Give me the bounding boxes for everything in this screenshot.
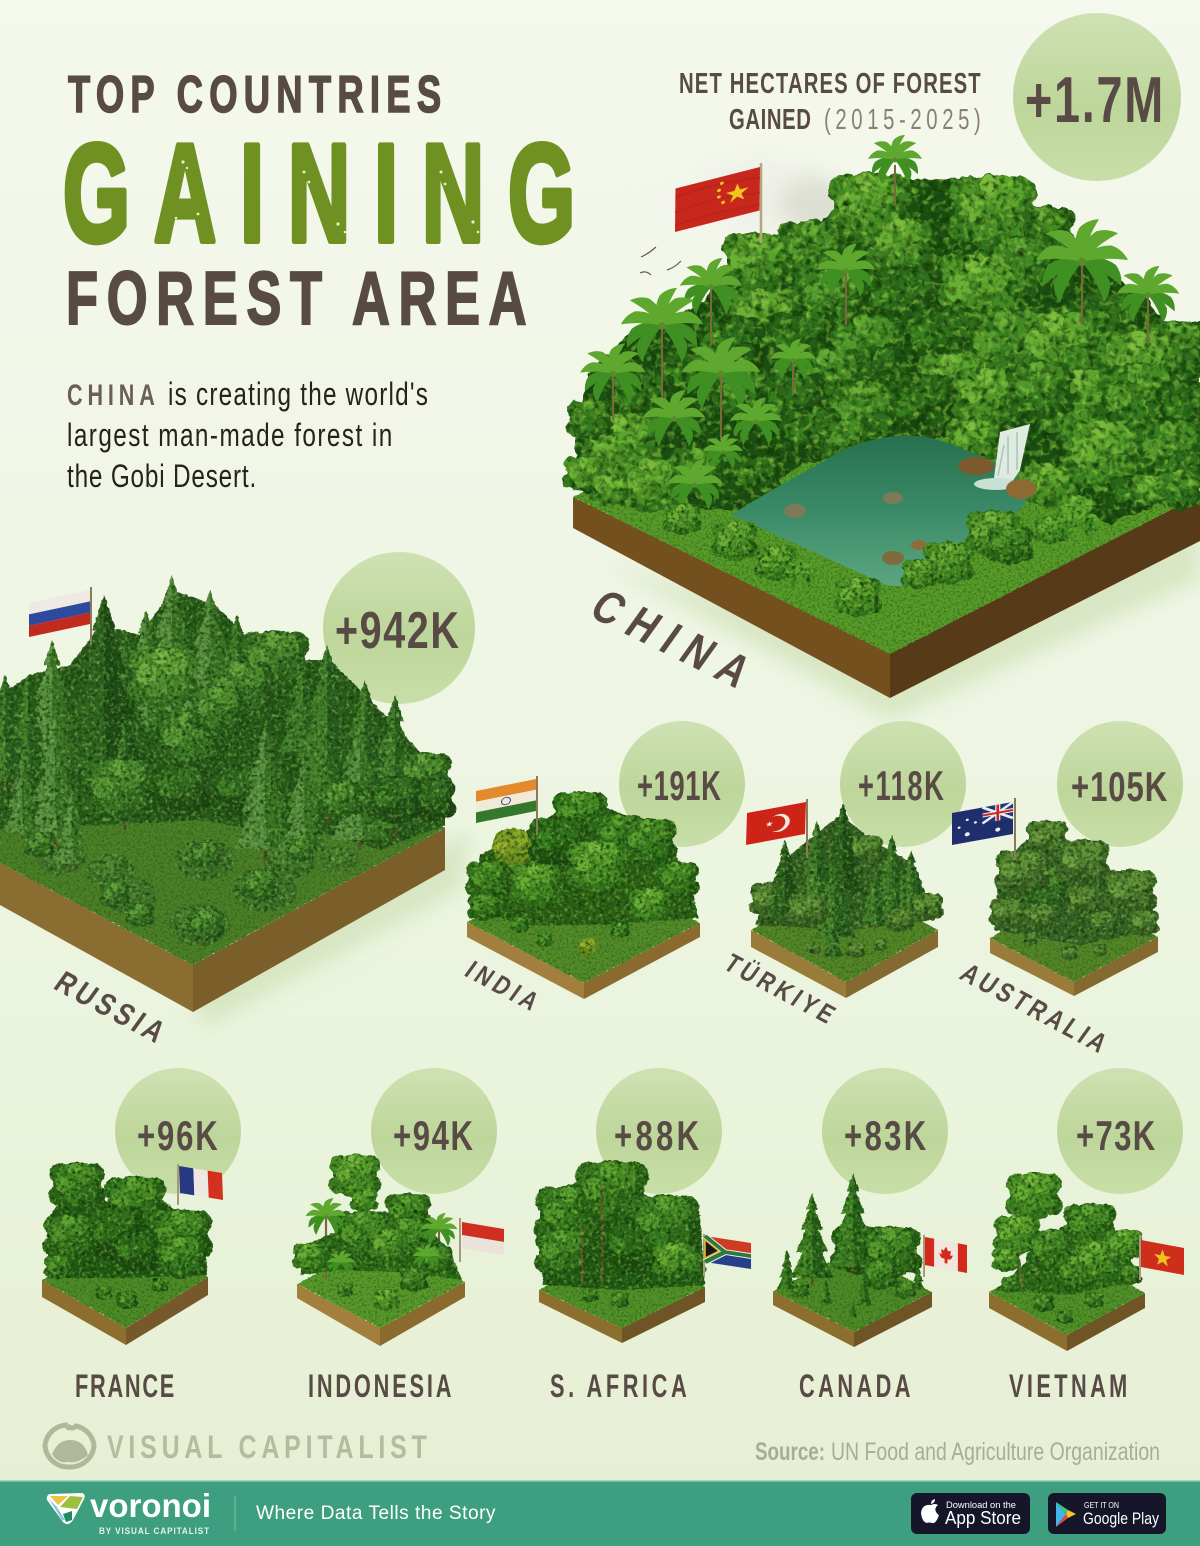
flag: Canada bbox=[924, 1235, 967, 1277]
country label: India: INDIA bbox=[459, 956, 544, 1016]
intro text: the Gobi Desert. bbox=[67, 459, 256, 495]
flag: South Africa bbox=[704, 1234, 751, 1276]
voronoi logo bbox=[47, 1487, 211, 1536]
island terrain: France bbox=[42, 1235, 208, 1345]
island terrain: Türkiye bbox=[751, 880, 938, 998]
button: App Store: Download on the bbox=[946, 1500, 1016, 1510]
forest: China bbox=[562, 172, 1200, 526]
legend caption: net hectares: (2015-2025) bbox=[824, 104, 981, 136]
island terrain: South Africa bbox=[539, 1245, 705, 1343]
value badge: China: +1.7M bbox=[1025, 65, 1163, 137]
flag: Türkiye bbox=[746, 799, 807, 858]
button: App Store bbox=[911, 1493, 1030, 1534]
value badge: Indonesia: +94K bbox=[393, 1112, 473, 1159]
value badge: Vietnam bbox=[1057, 1068, 1183, 1194]
island terrain: China bbox=[573, 340, 1200, 720]
value badge: Türkiye: +118K bbox=[858, 762, 944, 809]
source: Source: bbox=[755, 1438, 825, 1466]
voronoi logo: voronoi bbox=[90, 1487, 211, 1524]
button: Google Play: Google Play bbox=[1083, 1509, 1159, 1528]
Visual Capitalist logo: VISUAL CAPITALIST bbox=[107, 1430, 427, 1466]
island terrain: Australia bbox=[990, 890, 1158, 996]
button: Google Play bbox=[1048, 1493, 1166, 1534]
panel: France bbox=[42, 1068, 241, 1404]
value badge: Russia: +942K bbox=[335, 601, 459, 659]
tagline: Where Data Tells the Story bbox=[256, 1503, 496, 1524]
panel: India bbox=[459, 721, 745, 1016]
value badge: South Africa: +88K bbox=[614, 1112, 699, 1159]
forest: Russia bbox=[0, 575, 456, 946]
intro text: is creating the world's bbox=[168, 377, 428, 413]
value badge: Australia bbox=[1057, 721, 1183, 847]
country label: Canada: CANADA bbox=[799, 1368, 911, 1404]
country label: Türkiye: TÜRKIYE bbox=[718, 949, 840, 1029]
country label: Russia: RUSSIA bbox=[48, 966, 172, 1050]
forest: France bbox=[42, 1162, 213, 1309]
flag: Russia bbox=[29, 587, 91, 645]
title bbox=[63, 64, 575, 340]
palms: China bbox=[580, 134, 1179, 510]
island terrain: Indonesia bbox=[297, 1240, 465, 1346]
foreground bushes: China bbox=[663, 500, 1101, 617]
title: GAINING bbox=[63, 115, 575, 271]
voronoi logo: BY VISUAL CAPITALIST bbox=[99, 1526, 210, 1536]
value badge: India: +191K bbox=[637, 762, 721, 809]
flag: Indonesia bbox=[460, 1218, 504, 1262]
panel: South Africa bbox=[534, 1068, 751, 1404]
forest: Canada bbox=[777, 1173, 925, 1318]
birds bbox=[640, 247, 681, 275]
flag: China bbox=[675, 163, 761, 243]
footer bar bbox=[0, 1480, 1200, 1546]
value badge: South Africa bbox=[596, 1068, 722, 1194]
legend caption: net hectares: NET HECTARES OF FOREST bbox=[679, 68, 981, 100]
panel: Australia bbox=[952, 721, 1183, 1059]
value badge: Russia bbox=[323, 552, 475, 704]
value badge: India bbox=[619, 721, 745, 847]
island terrain: Vietnam bbox=[989, 1250, 1145, 1351]
intro text: largest man-made forest in bbox=[67, 418, 392, 454]
legend caption: net hectares: GAINED bbox=[729, 104, 811, 136]
value badge: France bbox=[115, 1068, 241, 1194]
panel: Russia bbox=[0, 552, 475, 1050]
country label: Vietnam: VIETNAM bbox=[1009, 1368, 1127, 1404]
button: Google Play: GET IT ON bbox=[1084, 1501, 1119, 1510]
flag: Australia bbox=[952, 798, 1015, 860]
panel: Vietnam bbox=[989, 1068, 1184, 1404]
pond with waterfall bbox=[731, 424, 1036, 586]
country label: South Africa: S. AFRICA bbox=[550, 1368, 687, 1404]
panel: China bbox=[562, 13, 1200, 720]
title: TOP COUNTRIES bbox=[68, 64, 441, 124]
panel: Indonesia bbox=[292, 1068, 504, 1404]
country label: China: CHINA bbox=[581, 581, 761, 698]
panel: Canada bbox=[773, 1068, 967, 1404]
forest: India bbox=[465, 791, 700, 956]
forest: Türkiye bbox=[749, 803, 944, 960]
flag: Vietnam bbox=[1140, 1235, 1184, 1280]
forest: South Africa bbox=[534, 1160, 706, 1308]
country label: France: FRANCE bbox=[75, 1368, 174, 1404]
intro text bbox=[67, 377, 428, 495]
value badge: Türkiye bbox=[840, 721, 966, 847]
value badge: Canada bbox=[822, 1068, 948, 1194]
cloud behind flag bbox=[650, 157, 850, 233]
value badge: China bbox=[1013, 13, 1181, 181]
country label: Indonesia: INDONESIA bbox=[308, 1368, 452, 1404]
flag: France bbox=[178, 1164, 223, 1205]
value badge: Vietnam: +73K bbox=[1076, 1112, 1155, 1159]
country label: Australia: AUSTRALIA bbox=[954, 958, 1113, 1059]
value badge: Canada: +83K bbox=[844, 1112, 926, 1159]
flag: India bbox=[476, 776, 537, 835]
value badge: Indonesia bbox=[371, 1068, 497, 1194]
island terrain: Canada bbox=[773, 1250, 932, 1347]
forest: Australia bbox=[989, 820, 1160, 960]
value badge: France: +96K bbox=[137, 1112, 218, 1159]
panel: Türkiye bbox=[718, 721, 966, 1029]
forest: Vietnam bbox=[992, 1172, 1143, 1324]
title: FOREST AREA bbox=[66, 256, 527, 340]
island terrain: India bbox=[467, 860, 700, 999]
value badge: Australia: +105K bbox=[1071, 763, 1167, 810]
forest: Indonesia bbox=[292, 1154, 462, 1311]
legend caption: net hectares bbox=[679, 68, 981, 136]
intro text: CHINA bbox=[67, 377, 155, 412]
button: App Store: App Store bbox=[945, 1508, 1021, 1528]
island terrain: Russia bbox=[0, 700, 470, 1030]
